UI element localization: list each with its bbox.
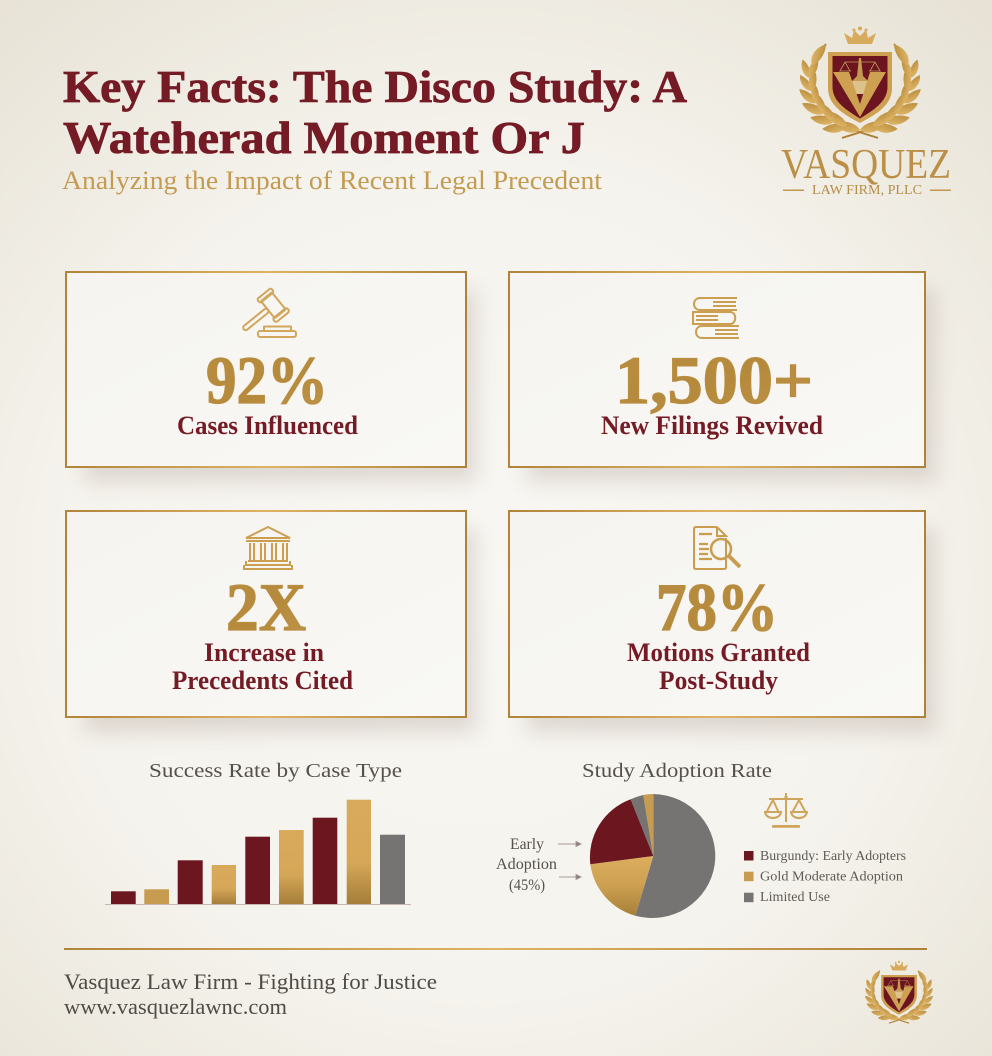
pie chart — [590, 794, 715, 918]
callout: early adoption: Early — [510, 836, 544, 853]
panel: precedents cited — [66, 511, 476, 733]
footer text — [64, 969, 437, 1019]
legend — [744, 849, 906, 905]
icon: gavel — [234, 288, 296, 341]
callout: early adoption: Adoption — [496, 856, 557, 873]
heading: study adoption rate: Study Adoption Rate — [582, 760, 772, 782]
logo wordmark: VASQUEZ — [781, 142, 951, 188]
title — [63, 61, 687, 163]
label: new filings reviewed: New Filings Revived — [601, 411, 824, 440]
icon: footer crest — [863, 961, 935, 1023]
arrow: lower — [559, 874, 581, 880]
footer text: Vasquez Law Firm - Fighting for Justice — [64, 969, 437, 994]
bar chart — [105, 800, 411, 905]
callout: early adoption — [496, 836, 581, 894]
icon: scales of justice — [765, 793, 807, 826]
heading: success rate by case type: Success Rate by Case Type — [149, 760, 402, 782]
label: increase in precedents cited — [172, 638, 354, 695]
panel: cases influenced — [66, 272, 476, 482]
title: Key Facts: The Disco Study: A — [63, 61, 687, 112]
label: increase in precedents cited: Precedents Cited — [172, 666, 354, 695]
legend item: gold: Gold Moderate Adoption — [760, 870, 903, 884]
icon: books — [693, 298, 739, 338]
title: Wateherad Moment Or J — [63, 112, 585, 163]
label: cases influenced: Cases Influenced — [177, 411, 359, 440]
label: motions granted post-study: Motions Granted — [627, 638, 811, 667]
stat: 78%: 78% — [656, 569, 778, 645]
icon: crest with laurel, crown and shield — [796, 26, 924, 138]
label: motions granted post-study: Post-Study — [659, 666, 778, 695]
subtitle: Analyzing the Impact of Recent Legal Precedent — [62, 166, 603, 195]
logo tagline: LAW FIRM, PLLC — [812, 183, 922, 198]
stat: 92%: 92% — [206, 342, 328, 418]
arrow: upper — [558, 842, 581, 846]
label: increase in precedents cited: Increase in — [204, 638, 325, 667]
legend item: burgundy: Burgundy: Early Adopters — [760, 849, 906, 864]
icon: courthouse — [244, 527, 292, 569]
stat: 1,500+: 1,500+ — [615, 342, 813, 418]
footer text: www.vasquezlawnc.com — [64, 994, 287, 1019]
label: motions granted post-study — [627, 638, 811, 695]
icon: document with magnifier — [694, 527, 740, 569]
stat: 2X: 2X — [226, 569, 306, 645]
panel: new filings reviewed — [509, 272, 936, 482]
logo: Vasquez Law Firm — [781, 26, 951, 198]
callout: early adoption: (45%) — [509, 877, 545, 894]
legend item: limited use: Limited Use — [760, 890, 830, 905]
panel: motions granted — [509, 511, 936, 733]
